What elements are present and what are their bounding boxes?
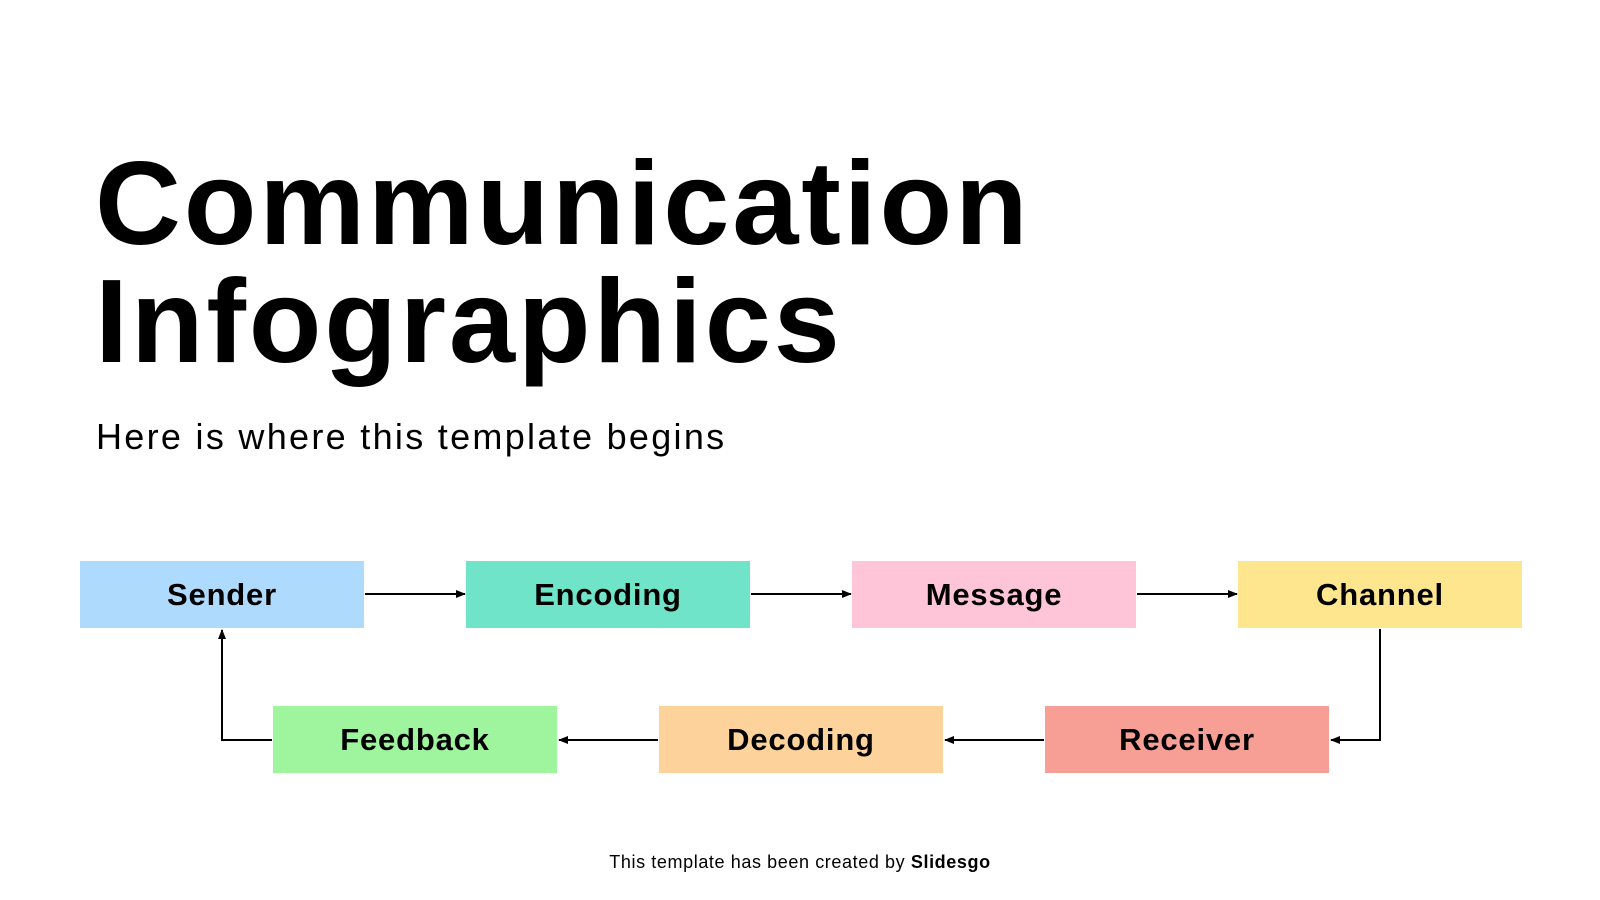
box: Channel	[1238, 561, 1522, 628]
box: Channel: Channel	[1316, 576, 1444, 612]
box: Message: Message	[926, 576, 1062, 612]
box: Message	[852, 561, 1136, 628]
box: Encoding	[466, 561, 750, 628]
box: Feedback	[273, 706, 557, 773]
box: Sender: Sender	[167, 576, 277, 612]
box: Decoding	[659, 706, 943, 773]
box: Receiver: Receiver	[1119, 722, 1255, 756]
box: Encoding: Encoding	[534, 576, 682, 612]
box: Receiver	[1045, 706, 1329, 773]
box: Sender	[80, 561, 364, 628]
title	[95, 137, 1031, 388]
box: Feedback: Feedback	[340, 722, 490, 756]
box: Decoding: Decoding	[727, 722, 875, 756]
title: Infographics	[95, 255, 843, 388]
title: Communication	[95, 137, 1031, 270]
subtitle: Here is where this template begins	[96, 416, 726, 457]
footer: This template has been created by Slidesgo	[609, 852, 991, 872]
